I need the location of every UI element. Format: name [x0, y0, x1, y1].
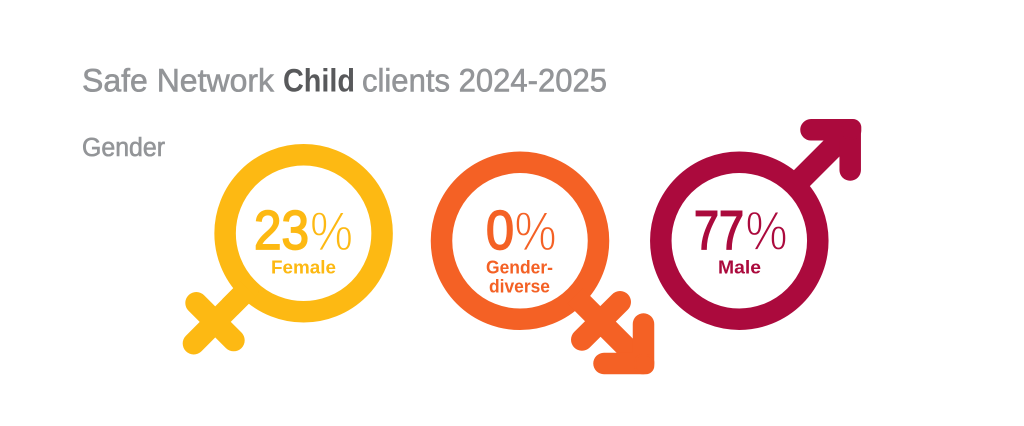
label: gender-diverse: [486, 256, 553, 296]
stat: 23%: [254, 199, 353, 262]
title: Safe Network: [82, 62, 275, 98]
icon: male symbol: [661, 120, 860, 319]
panel: male: [661, 120, 860, 319]
label: gender-diverse: Gender-: [486, 256, 553, 278]
stat: 23%: %: [310, 200, 353, 262]
stat: 0%: [486, 199, 556, 262]
title: [82, 62, 607, 98]
panel: female: [194, 155, 382, 344]
label: female: Female: [271, 256, 336, 278]
stat: 23%: 23: [254, 199, 309, 261]
stat: 77%: [694, 199, 788, 262]
icon: female symbol: [194, 155, 382, 344]
title: clients 2024-2025: [362, 62, 607, 98]
stat: 0%: %: [514, 200, 556, 262]
panel: gender-diverse: [442, 162, 653, 373]
label: gender-diverse: diverse: [489, 276, 550, 296]
heading: gender: Gender: [82, 134, 165, 162]
stat: 0%: 0: [486, 199, 514, 261]
stat: 77%: 77: [694, 199, 744, 261]
stat: 77%: %: [746, 200, 788, 262]
icon: gender-diverse symbol: [442, 162, 653, 373]
title: Child: [283, 62, 355, 98]
label: male: Male: [718, 256, 761, 278]
